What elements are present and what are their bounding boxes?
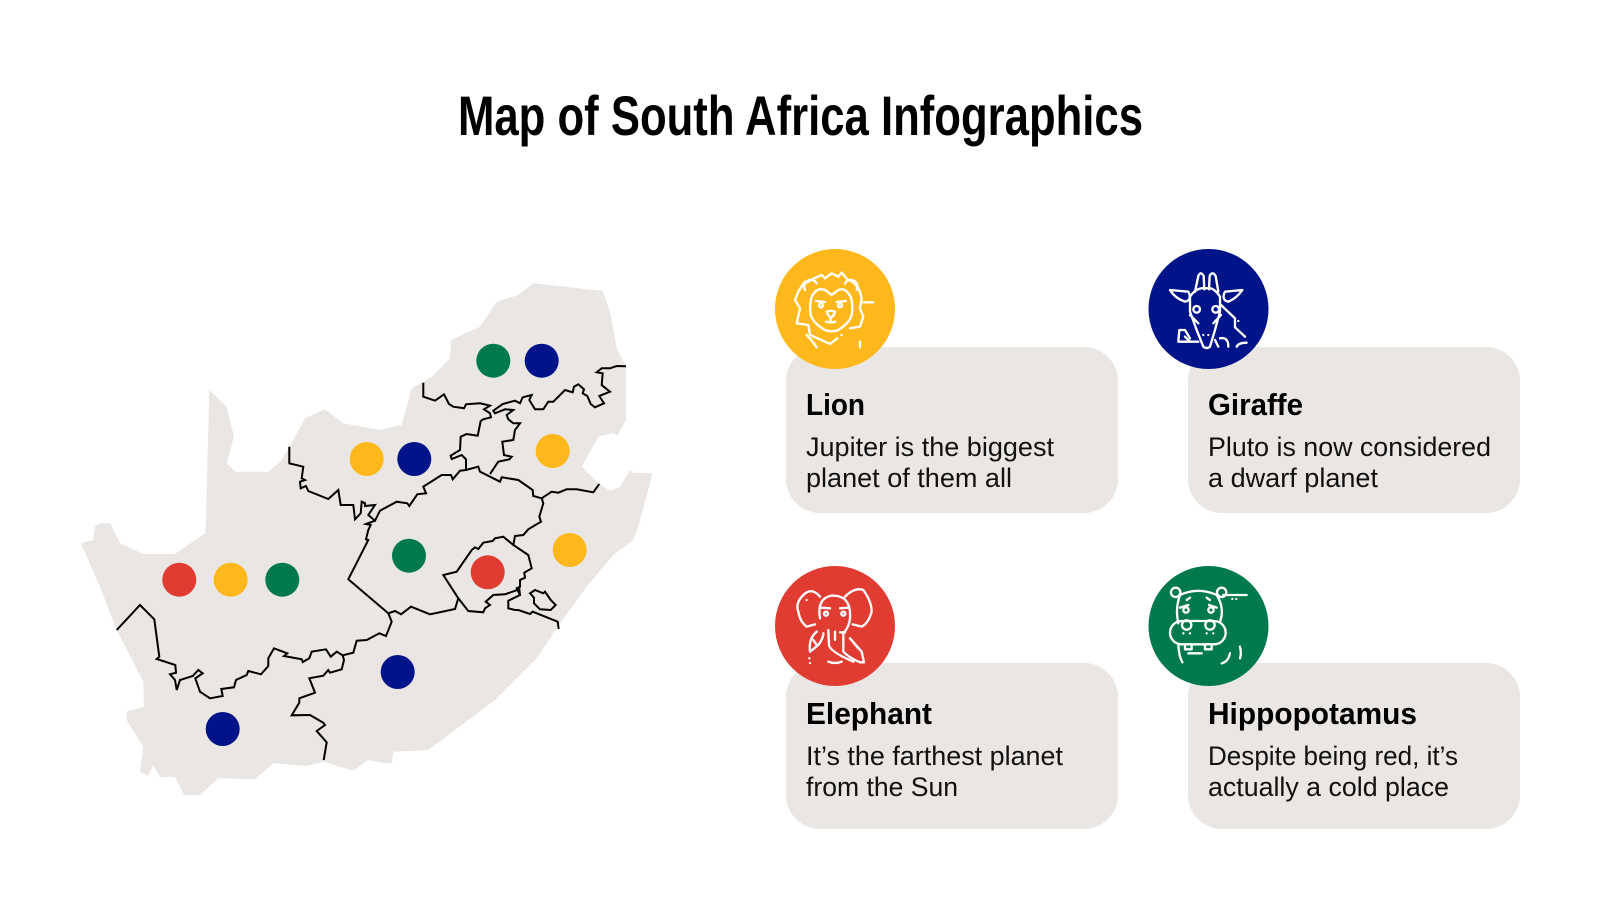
provincial borders <box>117 366 626 760</box>
heading: hippopotamus: Hippopotamus <box>1208 696 1417 731</box>
map markers <box>162 344 587 746</box>
heading: lion: Lion <box>806 387 865 422</box>
panel: giraffe <box>1148 249 1520 513</box>
icon: lion <box>775 249 895 369</box>
text: lion: Jupiter is the biggest <box>806 432 1055 462</box>
text: lion <box>806 432 1055 493</box>
text: elephant: from the Sun <box>806 772 958 802</box>
panel: elephant <box>775 566 1118 829</box>
text: elephant <box>806 741 1064 802</box>
title: Map of South Africa Infographics <box>458 84 1143 147</box>
text: hippopotamus: actually a cold place <box>1208 772 1449 802</box>
heading: giraffe: Giraffe <box>1208 387 1303 422</box>
icon: hippopotamus <box>1148 566 1268 686</box>
map silhouette <box>81 283 653 795</box>
text: hippopotamus: Despite being red, it’s <box>1208 741 1458 771</box>
text: giraffe <box>1208 432 1491 493</box>
icon: giraffe <box>1148 249 1268 369</box>
text: giraffe: Pluto is now considered <box>1208 432 1491 462</box>
card: lion <box>786 347 1118 513</box>
panel: hippopotamus <box>1148 566 1520 829</box>
text: giraffe: a dwarf planet <box>1208 463 1379 493</box>
card: elephant <box>786 663 1118 829</box>
map of South Africa <box>81 283 653 795</box>
panel: lion <box>775 249 1118 513</box>
text: lion: planet of them all <box>806 463 1012 493</box>
icon: elephant <box>775 566 895 686</box>
card: giraffe <box>1188 347 1520 513</box>
text: hippopotamus <box>1208 741 1458 802</box>
text: elephant: It’s the farthest planet <box>806 741 1064 771</box>
card: hippopotamus <box>1188 663 1520 829</box>
heading: elephant: Elephant <box>806 696 932 731</box>
